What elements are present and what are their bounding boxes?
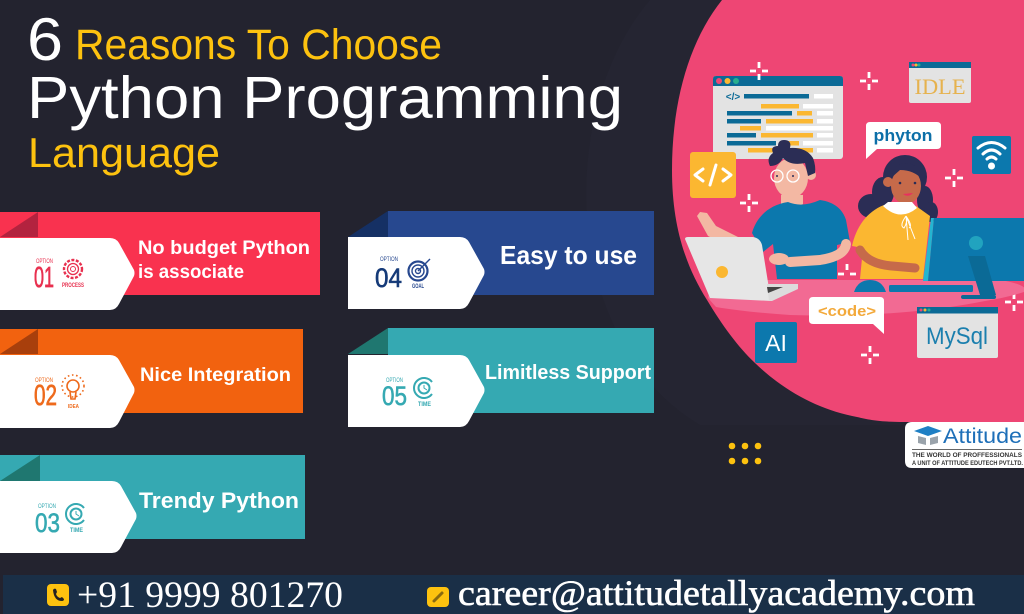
banner 01: no budget: 01 xyxy=(34,262,54,294)
banner 04: easy to use: OPTION xyxy=(380,257,398,263)
illustration: code speech bubble: <code> xyxy=(818,303,876,320)
banner 04: easy to use: 04 xyxy=(375,263,402,293)
banner 01: no budget: is associate xyxy=(138,262,244,283)
banner 03: trendy python: TIME xyxy=(70,528,83,534)
illustration: monitor xyxy=(923,218,1024,299)
logo: Attitude: THE WORLD OF PROFFESSIONALS xyxy=(912,452,1023,459)
email address: career@attitudetallyacademy.com xyxy=(458,573,975,613)
banner 05: limitless support: Limitless Support xyxy=(485,362,651,384)
title: Reasons To Choose xyxy=(75,21,442,69)
icon: clock xyxy=(414,378,432,398)
panel: pink illustration blob xyxy=(672,0,1024,422)
banner 04: easy to use: Easy to use xyxy=(500,240,637,270)
illustration: laptop xyxy=(685,237,798,301)
banner 01: no budget: PROCESS xyxy=(62,283,84,289)
banner 03: trendy python: OPTION xyxy=(38,504,56,510)
icon: wifi xyxy=(972,136,1011,174)
illustration: code window: </> xyxy=(726,92,740,103)
logo: Attitude: Attitude xyxy=(943,425,1022,448)
icon: gear xyxy=(64,260,82,278)
icon: target xyxy=(408,259,430,280)
banner 01: no budget xyxy=(0,212,320,310)
banner 04: easy to use xyxy=(348,211,654,309)
icon: AI badge: AI xyxy=(765,330,787,356)
logo: Attitude xyxy=(905,422,1024,468)
illustration: code window xyxy=(713,76,843,159)
banner 03: trendy python xyxy=(0,455,305,553)
banner 01: no budget: No budget Python xyxy=(138,238,310,259)
banner 05: limitless support: OPTION xyxy=(386,378,403,384)
banner 01: no budget: OPTION xyxy=(36,259,53,265)
title xyxy=(27,6,623,176)
title: Python Programming xyxy=(27,65,623,131)
contact bar xyxy=(3,573,1024,614)
banner 04: easy to use: GOAL xyxy=(412,284,424,290)
banner 02: nice integration: IDEA xyxy=(68,404,79,410)
illustration: IDLE window: IDLE xyxy=(914,74,966,99)
sparkles xyxy=(740,62,1023,364)
decorative yellow dots xyxy=(729,443,761,464)
illustration: MySql window xyxy=(917,307,998,358)
banner 02: nice integration: 02 xyxy=(34,380,57,412)
icon: code tag xyxy=(690,152,736,198)
banner 03: trendy python: 03 xyxy=(35,508,60,538)
banner 05: limitless support: 05 xyxy=(382,381,407,411)
illustration: MySql window: MySql xyxy=(926,323,988,350)
illustration: mouse and keyboard xyxy=(854,280,973,292)
illustration: phyton speech bubble: phyton xyxy=(874,126,932,145)
illustration: desk xyxy=(708,280,1024,315)
banner 02: nice integration: OPTION xyxy=(35,378,53,384)
icon: light bulb xyxy=(62,375,84,399)
banner 05: limitless support xyxy=(348,328,654,427)
icon: phone xyxy=(47,584,69,606)
illustration: man xyxy=(697,140,850,279)
banner 02: nice integration xyxy=(0,329,303,428)
icon: link xyxy=(427,587,449,607)
sparkle over desk xyxy=(838,264,856,274)
title: Language xyxy=(28,129,220,176)
banner 05: limitless support: TIME xyxy=(418,402,431,408)
icon: AI badge xyxy=(755,322,797,363)
banner 03: trendy python: Trendy Python xyxy=(139,488,299,513)
illustration: woman xyxy=(852,155,938,279)
illustration: IDLE window xyxy=(909,62,971,103)
illustration: phyton speech bubble xyxy=(866,122,941,159)
illustration: code speech bubble xyxy=(809,297,884,334)
title: 6 xyxy=(27,6,63,73)
icon: clock xyxy=(66,504,84,524)
banner 02: nice integration: Nice Integration xyxy=(140,365,291,386)
